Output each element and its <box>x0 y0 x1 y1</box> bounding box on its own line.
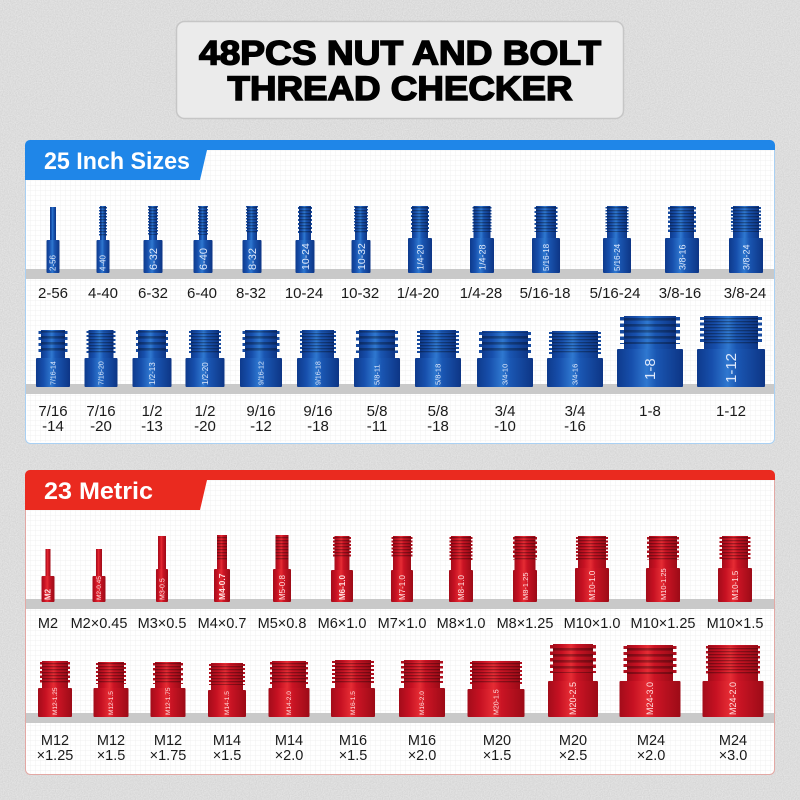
caption 10-24: 10-24 <box>285 285 323 302</box>
caption M12x1.75: M12 <box>154 733 182 749</box>
bolt 1-12 <box>697 316 765 387</box>
caption 3/4-16: -16 <box>564 418 586 435</box>
caption M12x1.5: M12 <box>97 733 125 749</box>
caption M8x1.25: M8×1.25 <box>497 616 553 632</box>
shelf strip row 1 <box>26 269 774 279</box>
caption M5x0.8: M5×0.8 <box>258 616 306 632</box>
bolt 1/4-20 <box>408 206 432 273</box>
bolt M12x1.5: M12-1.5 <box>108 691 115 715</box>
bolt 1/4-28: 1/4-28 <box>478 244 488 270</box>
caption 9/16-18: 9/16 <box>303 403 333 420</box>
bolt 7/16-14: 7/16-14 <box>50 361 58 385</box>
caption 5/8-11: 5/8 <box>367 403 387 420</box>
bolt 5/16-24 <box>603 206 631 273</box>
caption M12x1.5: ×1.5 <box>97 748 125 764</box>
caption M3x0.5: M3×0.5 <box>138 616 186 632</box>
bolt 5/8-18 <box>415 330 461 387</box>
caption M24x2.0: M24 <box>637 733 665 749</box>
bolt 9/16-12: 9/16-12 <box>258 361 266 385</box>
caption 1/4-28: 1/4-28 <box>460 285 502 302</box>
caption 7/16-14: -14 <box>42 418 64 435</box>
bolt M24x2.0: M24-3.0 <box>645 682 655 715</box>
caption 5/8-11: -11 <box>367 418 387 435</box>
bolt 3/4-16: 3/4-16 <box>570 364 580 385</box>
bolt M14x1.5 <box>208 663 246 717</box>
bolt M20x1.5 <box>468 661 524 717</box>
heading: 25 Inch Sizes: 25 Inch Sizes <box>44 148 190 175</box>
bolt M24x2.0 <box>620 645 680 717</box>
bolt 10-24: 10-24 <box>300 243 312 270</box>
caption M20x1.5: ×1.5 <box>483 748 511 764</box>
bolt 8-32: 8-32 <box>247 248 259 270</box>
caption 9/16-12: 9/16 <box>246 403 276 420</box>
caption 1-8: 1-8 <box>639 403 661 420</box>
bolt M24x3.0: M24-2.0 <box>728 682 738 715</box>
bolt M4x0.7 <box>214 535 230 602</box>
shelf strip row 2 <box>26 384 774 394</box>
heading: 23 Metric: 23 Metric <box>44 478 153 505</box>
panel: 25 inch sizes <box>25 140 775 444</box>
bolt 1-12: 1-12 <box>723 353 740 383</box>
caption M12x1.25: ×1.25 <box>37 748 73 764</box>
bolt 7/16-20 <box>84 330 118 387</box>
bolt M24x3.0 <box>702 645 764 717</box>
caption 4-40: 4-40 <box>88 285 118 302</box>
bolt 4-40: 4-40 <box>98 254 108 271</box>
bolt 6-40: 6-40 <box>198 248 210 270</box>
bolt 1/2-20: 1/2-20 <box>201 362 210 385</box>
bolt M10x1.0: M10-1.0 <box>588 570 597 600</box>
caption 2-56: 2-56 <box>38 285 68 302</box>
bolt 9/16-18 <box>297 330 339 387</box>
bolt M7x1.0: M7-1.0 <box>398 575 407 600</box>
bolt 10-24 <box>296 206 314 273</box>
caption M7x1.0: M7×1.0 <box>378 616 426 632</box>
caption M20x2.5: ×2.5 <box>559 748 587 764</box>
caption M14x2.0: M14 <box>275 733 303 749</box>
caption 1/4-20: 1/4-20 <box>397 285 439 302</box>
bolt M2 <box>42 549 54 602</box>
blue header band and tab <box>25 140 775 180</box>
caption 5/8-18: -18 <box>427 418 449 435</box>
caption M24x3.0: M24 <box>719 733 747 749</box>
bolt M20x1.5: M20-1.5 <box>494 689 500 715</box>
bolt 7/16-14 <box>36 330 70 387</box>
panel: 23 metric <box>25 470 775 774</box>
caption M10x1.0: M10×1.0 <box>564 616 620 632</box>
bolt 1-8 <box>617 316 683 387</box>
caption M12x1.25: M12 <box>41 733 69 749</box>
bolt 2-56: 2-56 <box>48 254 58 271</box>
bolt 9/16-18: 9/16-18 <box>316 361 322 385</box>
bolt M8x1.0: M8-1.0 <box>457 575 466 600</box>
bolt M16x2.0 <box>399 660 445 717</box>
bolt M20x2.5 <box>548 644 598 717</box>
caption 3/4-10: -10 <box>494 418 516 435</box>
caption M20x1.5: M20 <box>483 733 511 749</box>
bolt M2x0.45 <box>92 549 106 602</box>
bolt 4-40 <box>96 206 110 273</box>
bolt 3/4-10: 3/4-10 <box>500 364 510 385</box>
bolt M14x1.5: M14-1.5 <box>224 691 231 715</box>
bolt M2x0.45: M2-0.45 <box>96 576 103 600</box>
caption 7/16-20: -20 <box>90 418 112 435</box>
caption M10x1.25: M10×1.25 <box>631 616 695 632</box>
caption 7/16-20: 7/16 <box>86 403 116 420</box>
bolt M12x1.25: M12-1.25 <box>52 687 59 715</box>
bolt M12x1.5 <box>94 662 128 717</box>
caption 9/16-18: -18 <box>307 418 329 435</box>
bolt M3x0.5 <box>156 536 168 602</box>
bolt 5/16-18 <box>532 206 560 273</box>
bolt M3x0.5: M3-0.5 <box>160 578 166 600</box>
caption 1/2-20: 1/2 <box>195 403 215 420</box>
bolt M5x0.8 <box>273 535 291 602</box>
caption M14x1.5: ×1.5 <box>213 748 241 764</box>
bolt 8-32 <box>242 206 262 273</box>
bolt 1-8: 1-8 <box>642 358 659 380</box>
title box <box>176 22 624 118</box>
bolt 5/8-11 <box>354 330 400 387</box>
caption 6-40: 6-40 <box>187 285 217 302</box>
caption M2x0.45: M2×0.45 <box>71 616 127 632</box>
bolt 5/8-11: 5/8-11 <box>372 364 382 385</box>
caption M24x3.0: ×3.0 <box>719 748 747 764</box>
bolt M2: M2 <box>44 588 52 600</box>
caption 1-12: 1-12 <box>716 403 746 420</box>
caption 7/16-14: 7/16 <box>38 403 68 420</box>
bolt M10x1.25 <box>646 536 680 602</box>
caption M16x2.0: ×2.0 <box>408 748 436 764</box>
caption 3/8-16: 3/8-16 <box>659 285 701 302</box>
bolt 3/4-10 <box>477 331 533 387</box>
bolt 3/4-16 <box>547 331 603 387</box>
bolt M10x1.5: M10-1.5 <box>731 570 740 600</box>
bolt 5/16-18: 5/16-18 <box>542 243 551 271</box>
caption 6-32: 6-32 <box>138 285 168 302</box>
caption M24x2.0: ×2.0 <box>637 748 665 764</box>
title box: THREAD CHECKER <box>228 70 572 108</box>
bolt 1/4-20: 1/4-20 <box>416 244 426 270</box>
bolt M7x1.0 <box>391 536 413 602</box>
caption 5/16-24: 5/16-24 <box>590 285 640 302</box>
caption M4x0.7: M4×0.7 <box>198 616 246 632</box>
bolt M20x2.5: M20-2.5 <box>568 682 578 715</box>
bolt 6-32: 6-32 <box>148 248 160 270</box>
caption 8-32: 8-32 <box>236 285 266 302</box>
bolt M8x1.25 <box>513 536 537 602</box>
bolt 1/2-13: 1/2-13 <box>148 362 157 385</box>
caption M14x1.5: M14 <box>213 733 241 749</box>
bolt M10x1.0 <box>575 536 609 602</box>
bolt 3/8-24: 3/8-24 <box>742 244 752 270</box>
bolt M16x1.5 <box>331 660 375 717</box>
bolt 5/8-18: 5/8-18 <box>434 364 442 385</box>
bolt M12x1.75: M12-1.75 <box>165 687 172 715</box>
caption 10-32: 10-32 <box>341 285 379 302</box>
caption 5/16-18: 5/16-18 <box>520 285 570 302</box>
red header band and tab <box>25 470 775 510</box>
bolt 1/2-20 <box>186 330 224 387</box>
bolt 9/16-12 <box>240 330 282 387</box>
shelf strip row 3 <box>26 599 774 609</box>
caption M16x1.5: M16 <box>339 733 367 749</box>
caption M16x2.0: M16 <box>408 733 436 749</box>
caption 5/8-18: 5/8 <box>428 403 448 420</box>
bolt 3/8-16 <box>665 206 699 273</box>
caption 1/2-13: 1/2 <box>142 403 162 420</box>
shelf strip row 4 <box>26 713 774 723</box>
bolt 6-32 <box>144 206 162 273</box>
bolt M14x2.0 <box>268 661 310 717</box>
panel background <box>26 470 774 774</box>
panel background <box>26 140 774 444</box>
bolt M10x1.25: M10-1.25 <box>659 568 668 600</box>
bolt M6x1.0: M6-1.0 <box>338 575 347 600</box>
caption 3/4-16: 3/4 <box>565 403 585 420</box>
title box: 48PCS NUT AND BOLT <box>199 34 601 72</box>
bolt M14x2.0: M14-2.0 <box>286 691 293 715</box>
caption 1/2-13: -13 <box>141 418 163 435</box>
caption 9/16-12: -12 <box>250 418 272 435</box>
bolt 7/16-20: 7/16-20 <box>98 361 106 385</box>
bolt 10-32 <box>352 206 370 273</box>
caption M20x2.5: M20 <box>559 733 587 749</box>
caption M10x1.5: M10×1.5 <box>707 616 763 632</box>
bolt M5x0.8: M5-0.8 <box>278 575 287 600</box>
bolt 6-40 <box>194 206 212 273</box>
bolt 10-32: 10-32 <box>356 243 368 270</box>
caption M2: M2 <box>38 616 58 632</box>
caption 3/8-24: 3/8-24 <box>724 285 766 302</box>
caption 3/4-10: 3/4 <box>495 403 515 420</box>
caption M12x1.75: ×1.75 <box>150 748 186 764</box>
caption 1/2-20: -20 <box>194 418 216 435</box>
caption M16x1.5: ×1.5 <box>339 748 367 764</box>
bolt 1/2-13 <box>132 330 172 387</box>
bolt 2-56 <box>46 207 60 273</box>
bolt M8x1.25: M8-1.25 <box>521 572 530 600</box>
caption M14x2.0: ×2.0 <box>275 748 303 764</box>
bolt M10x1.5 <box>718 536 752 602</box>
caption M8x1.0: M8×1.0 <box>437 616 485 632</box>
bolt M12x1.75 <box>150 662 186 717</box>
bolt M16x1.5: M16-1.5 <box>350 691 357 715</box>
bolt M16x2.0: M16-2.0 <box>419 691 426 715</box>
bolt 5/16-24: 5/16-24 <box>613 243 622 271</box>
caption M6x1.0: M6×1.0 <box>318 616 366 632</box>
bolt 3/8-16: 3/8-16 <box>678 244 688 270</box>
bolt M8x1.0 <box>449 536 473 602</box>
bolt 3/8-24 <box>729 206 763 273</box>
bolt M6x1.0 <box>331 536 353 602</box>
bolt M4x0.7: M4-0.7 <box>217 573 227 600</box>
bolt 1/4-28 <box>470 206 494 273</box>
bolt M12x1.25 <box>38 661 72 717</box>
